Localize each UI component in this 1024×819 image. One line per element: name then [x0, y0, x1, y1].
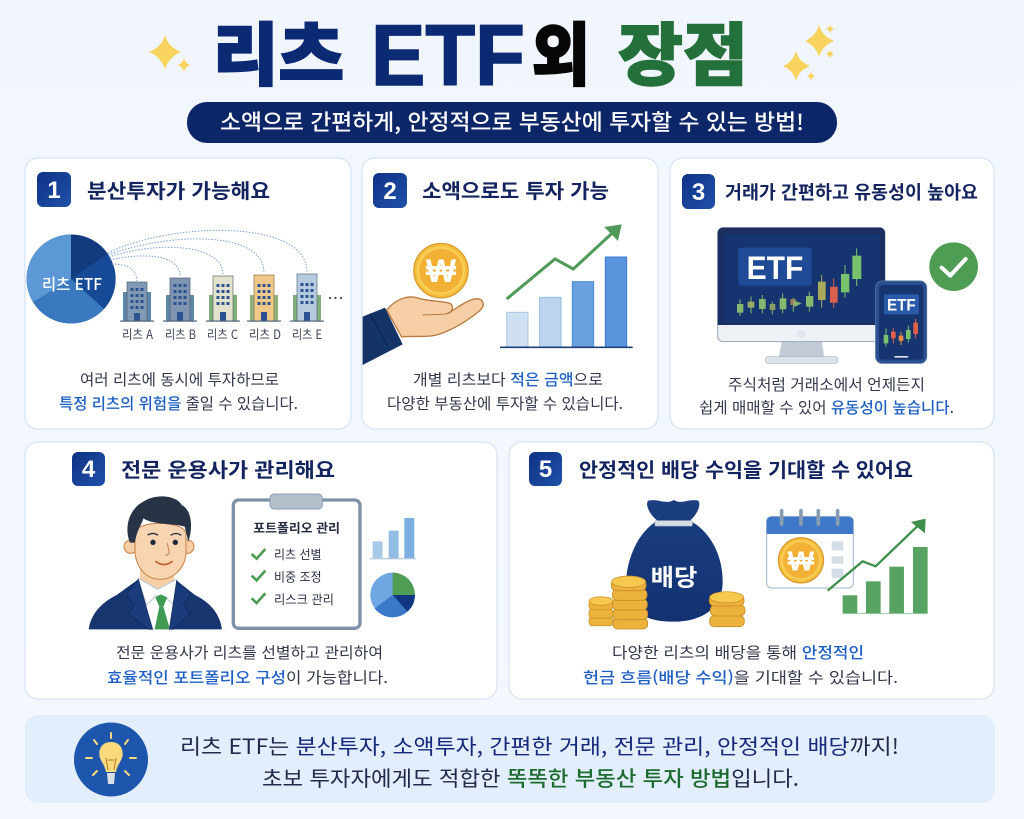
- description 5: [583, 641, 898, 688]
- summary text: [180, 731, 899, 793]
- clipboard: portfolio management: 리츠 선별: [274, 545, 322, 563]
- badge 5: [529, 452, 562, 486]
- chart: small pie: [370, 573, 415, 617]
- badge 2: 2: [383, 178, 397, 205]
- building labels: 리츠 A: [122, 324, 153, 343]
- icon: smartphone with ETF chart: ETF: [887, 296, 916, 315]
- heading 1: 분산투자가 가능해요: [87, 175, 270, 204]
- description 5: 다양한 리츠의 배당을 통해 안정적인: [612, 641, 864, 663]
- heading 4: 전문 운용사가 관리해요: [121, 454, 335, 483]
- panel: 5 dividends: [509, 442, 994, 699]
- icon: manager portrait: [89, 496, 222, 629]
- icon: monitor with ETF chart: ETF: [747, 250, 803, 286]
- badge 1: 1: [47, 177, 61, 204]
- chart: green bars with arrow: [828, 519, 928, 614]
- icon: hand holding coin: ₩: [426, 253, 457, 289]
- icon: building A: [120, 282, 154, 322]
- icon: building E: [290, 274, 324, 322]
- title: 외: [532, 0, 590, 100]
- icon: sparkles right: [783, 25, 834, 81]
- panel: 4 professional manager: [25, 442, 497, 699]
- badge 3: [682, 174, 715, 209]
- icon: building D: [247, 275, 281, 322]
- heading 2: 소액으로도 투자 가능: [422, 175, 609, 204]
- description 3: 쉽게 매매할 수 있어 유동성이 높습니다.: [699, 396, 954, 418]
- badge 4: [72, 452, 105, 486]
- panel: summary footer: [25, 715, 995, 803]
- icon: green check: [929, 242, 978, 291]
- summary text: 리츠 ETF는 분산투자, 소액투자, 간편한 거래, 전문 관리, 안정적인 배당 까지!: [180, 731, 899, 761]
- description 1: 여러 리츠에 동시에 투자하므로: [80, 368, 279, 390]
- clipboard: portfolio management: 비중 조정: [274, 567, 322, 585]
- description 5: 헌금 흐름(배당 수익) 을 기대할 수 있습니다.: [583, 666, 898, 688]
- subtitle pill: [187, 102, 837, 143]
- description 4: 효율적인 포트폴리오 구성 이 가능합니다.: [107, 666, 388, 688]
- description 2: 개별 리츠보다 적은 금액으로: [413, 368, 603, 390]
- chart: REIT ETF pie: 리츠 ETF: [42, 271, 102, 295]
- building labels: 리츠 D: [249, 324, 281, 343]
- panel: 1 diversification: [25, 158, 351, 429]
- summary text: 초보 투자자에게도 적합한 똑똑한 부동산 투자 방법 입니다.: [262, 763, 799, 793]
- description 2: 다양한 부동산에 투자할 수 있습니다.: [387, 392, 623, 414]
- description 4: [107, 641, 388, 688]
- chart: REIT ETF pie: [26, 234, 116, 324]
- icon: smartphone with ETF chart: [876, 281, 927, 363]
- badge 5: 5: [539, 456, 552, 483]
- title: ETF: [371, 8, 525, 104]
- clipboard: portfolio management: 포트폴리오 관리: [253, 518, 340, 536]
- panel: 2 small amount: [362, 158, 658, 429]
- description 3: [699, 373, 954, 418]
- icon: calendar with coin: [767, 511, 853, 588]
- icon: monitor with ETF chart: [718, 228, 885, 363]
- badge 1: [37, 172, 71, 207]
- icon: sparkles left: [149, 35, 190, 72]
- description 2: [387, 368, 623, 414]
- heading 5: 안정적인 배당 수익을 기대할 수 있어요: [579, 454, 913, 483]
- description 1: 특정 리츠의 위험을 줄일 수 있습니다.: [59, 392, 298, 414]
- chart: small bars: [370, 518, 416, 559]
- badge 4: 4: [82, 456, 96, 483]
- heading 3: 거래가 간편하고 유동성이 높아요: [725, 179, 978, 205]
- badge 3: 3: [692, 179, 705, 206]
- icon: building C: [206, 276, 240, 322]
- description 4: 전문 운용사가 리츠를 선별하고 관리하여: [116, 641, 383, 663]
- clipboard: portfolio management: 리스크 관리: [274, 590, 334, 608]
- building labels: [122, 297, 342, 343]
- building labels: 리츠 E: [292, 324, 322, 343]
- subtitle pill: 소액으로 간편하게, 안정적으로 부동산에 투자할 수 있는 방법!: [220, 105, 804, 137]
- badge 2: [373, 173, 407, 208]
- building labels: 리츠 C: [207, 324, 238, 343]
- title: [213, 0, 748, 104]
- description 1: [59, 368, 298, 414]
- icon: money bag with coins: [589, 500, 745, 629]
- icon: building B: [163, 278, 197, 322]
- title: 장점: [618, 0, 748, 100]
- panel: 3 easy trading: [670, 158, 994, 429]
- icon: calendar with coin: ₩: [788, 545, 815, 576]
- description 3: 주식처럼 거래소에서 언제든지: [728, 373, 925, 395]
- dotted connectors: [108, 230, 307, 281]
- chart: growth bars with arrow: [500, 224, 633, 347]
- clipboard: portfolio management: [233, 494, 360, 628]
- icon: light bulb: [74, 722, 148, 796]
- icon: hand holding coin: [363, 243, 483, 365]
- icon: money bag with coins: 배당: [651, 559, 697, 593]
- building labels: 리츠 B: [165, 324, 196, 343]
- title: 리츠: [213, 0, 344, 100]
